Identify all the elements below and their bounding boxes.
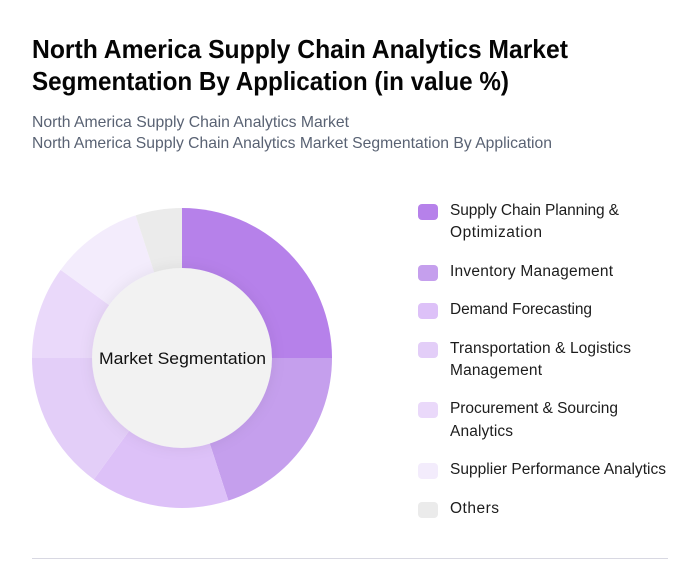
centre label: Market Segmentation xyxy=(99,349,266,368)
legend item: Supply Chain Planning & Optimization xyxy=(418,202,620,241)
legend item: Procurement & Sourcing Analytics: Procurement & Sourcing xyxy=(450,400,618,417)
legend item: Transportation & Logistics Management xyxy=(418,340,631,379)
legend item: Procurement & Sourcing Analytics: Analytics xyxy=(450,423,513,440)
legend item: Others xyxy=(418,500,499,518)
subtitle xyxy=(32,114,552,152)
legend item: Supplier Performance Analytics: Supplier Performance Analytics xyxy=(450,461,666,478)
title: Segmentation By Application (in value %) xyxy=(32,66,509,96)
donut centre xyxy=(92,268,272,448)
legend item: Transportation & Logistics Management: Management xyxy=(450,362,543,379)
legend item: Procurement & Sourcing Analytics xyxy=(418,400,618,440)
segment: Inventory Management xyxy=(182,358,332,501)
segment: Demand Forecasting xyxy=(94,358,228,508)
subtitle: North America Supply Chain Analytics Market xyxy=(32,114,350,131)
segment: Transportation & Logistics Management xyxy=(32,358,182,479)
legend item: Demand Forecasting: Demand Forecasting xyxy=(450,301,592,318)
title xyxy=(32,34,568,96)
segment: Procurement & Sourcing Analytics xyxy=(32,270,182,358)
segment: Supplier Performance Analytics xyxy=(61,215,182,358)
segment: Others xyxy=(136,208,182,358)
segment: Supply Chain Planning & Optimization xyxy=(182,208,332,358)
legend item: Supply Chain Planning & Optimization: Optimization xyxy=(450,224,542,241)
legend item: Transportation & Logistics Management: Transportation & Logistics xyxy=(450,340,631,357)
donut chart xyxy=(32,208,332,508)
legend item: Others: Others xyxy=(450,500,499,517)
legend xyxy=(418,202,666,518)
legend item: Inventory Management: Inventory Management xyxy=(450,263,614,280)
subtitle: North America Supply Chain Analytics Market Segmentation By Application xyxy=(32,135,552,152)
title: North America Supply Chain Analytics Market xyxy=(32,34,568,64)
legend item: Supply Chain Planning & Optimization: Supply Chain Planning & xyxy=(450,202,620,219)
